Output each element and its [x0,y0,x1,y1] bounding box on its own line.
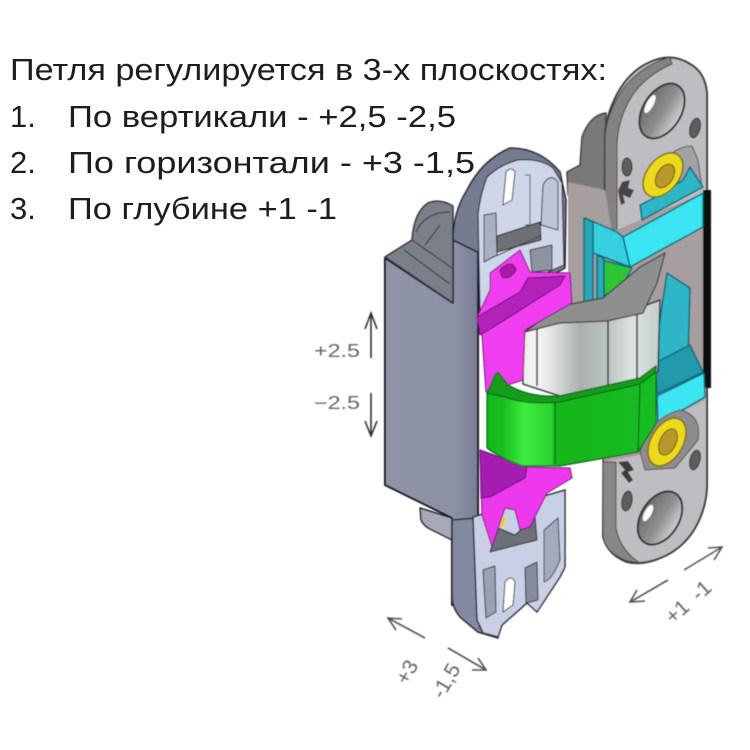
upper screw seat [660,146,702,205]
top knob [385,201,453,303]
arrow up-right [684,547,722,570]
arrow up-left [388,618,425,638]
list item 2: horizontal: По горизонтали - +3 -1,5 [68,145,475,180]
hinge 3D illustration [385,57,711,638]
grey wing above cylinder [525,253,665,332]
arrow down-right [448,648,486,670]
right mounting plate [603,57,707,563]
lower end plate [473,490,565,637]
lower screw [640,410,699,473]
grey cylinder knuckle [523,300,660,396]
list item 3: depth: 3. [10,191,36,226]
vertical adjustment label +2.5 -2.5 [314,313,377,436]
arrow down-left [630,580,668,602]
list item 3: depth: По глубине +1 -1 [68,191,337,226]
list item 2: horizontal: 2. [10,145,36,180]
horizontal adjustment label +3 -1.5: +3 [391,656,423,688]
knob behind right plate [567,113,606,195]
heading and adjustment list [10,52,607,226]
upper screw [635,145,691,205]
list item 1: vertical: 1. [10,99,36,134]
upper end plate rim [453,148,566,315]
black edge of back panel [703,190,711,388]
vertical adjustment label +2.5 -2.5: +2.5 [314,341,360,361]
green hinge band [487,366,656,466]
title: Петля регулируется в 3-х плоскостях: [10,52,607,87]
grey block face [385,240,478,605]
depth adjustment label +1 -1 [630,547,722,629]
top mounting hole [630,75,694,147]
arrow down [365,393,377,436]
lower magenta carriage [480,450,572,547]
bottom tab [452,518,498,638]
upper cyan bracket [584,167,703,312]
upper magenta carriage [477,250,572,392]
bottom nub [420,508,452,540]
vertical adjustment label +2.5 -2.5: −2.5 [314,393,360,413]
depth adjustment label +1 -1: +1 [661,596,694,629]
list item 1: vertical: По вертикали - +2,5 -2,5 [68,99,456,134]
horizontal adjustment label +3 -1.5: -1,5 [427,660,465,702]
left hinge body [385,148,566,638]
arrow up [365,313,377,358]
back panel behind hinge [568,182,705,462]
horizontal adjustment label +3 -1.5 [388,618,486,702]
upper end plate interior [478,160,564,315]
bottom mounting hole [629,483,691,553]
lower teal bracket [655,273,705,424]
depth adjustment label +1 -1: -1 [687,576,716,606]
